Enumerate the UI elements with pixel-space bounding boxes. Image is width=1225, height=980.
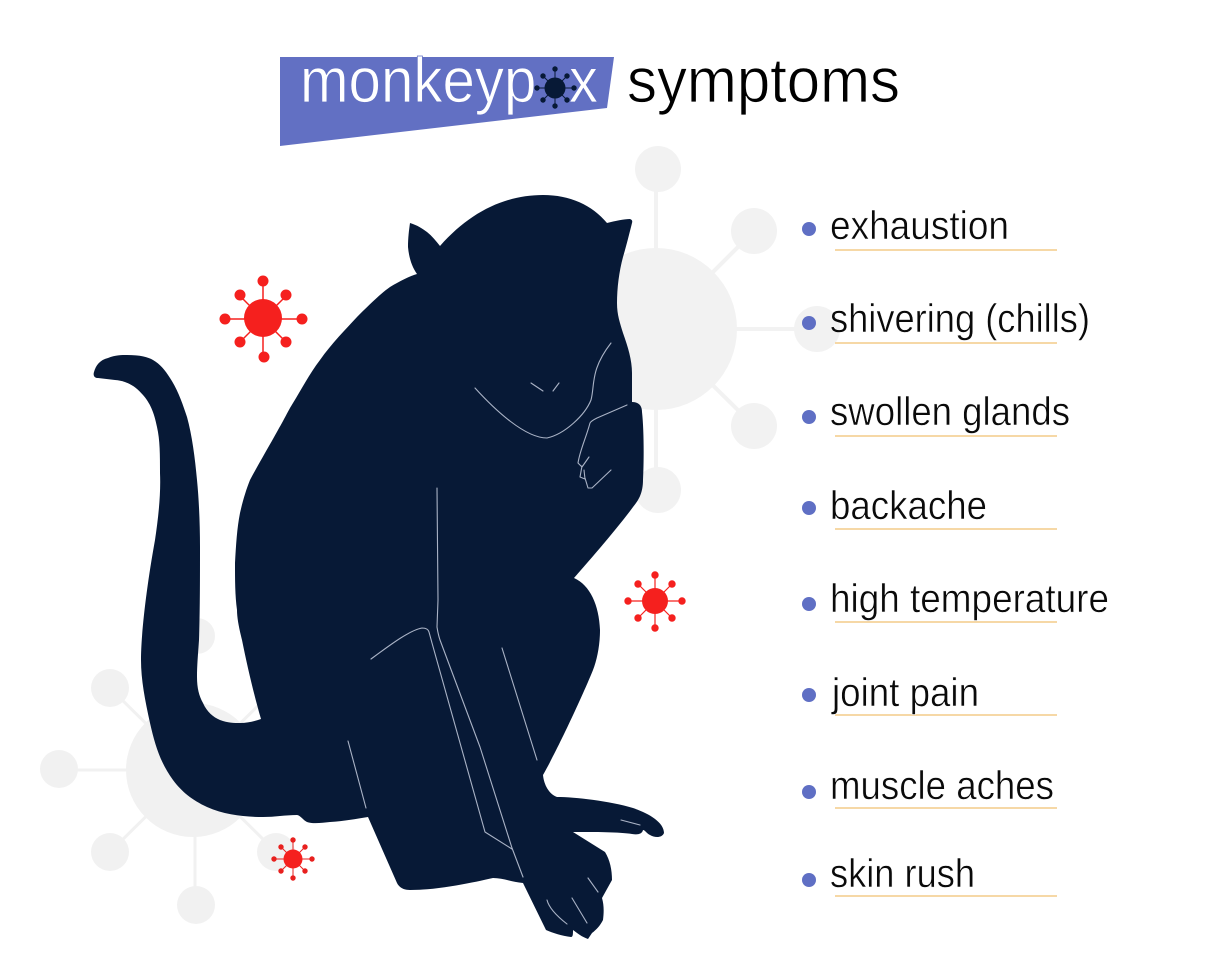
title: [280, 46, 900, 146]
icon: red virus, small: [271, 837, 315, 881]
symptom: shivering: shivering (chills): [830, 297, 1090, 341]
monkey detail lines: [348, 343, 640, 924]
icon: red virus, large: [220, 276, 308, 362]
symptom: muscle aches: muscle aches: [830, 764, 1054, 808]
symptom: joint pain: [802, 671, 1057, 715]
title word: symptoms: symptoms: [627, 46, 900, 116]
symptom: skin rush: [802, 852, 1057, 896]
symptom: backache: [802, 484, 1057, 529]
monkey body and tail: [94, 195, 664, 939]
symptom: swollen glands: swollen glands: [830, 390, 1070, 434]
monkey silhouette: [94, 195, 664, 939]
symptom: high temperature: high temperature: [830, 577, 1109, 621]
title banner: [280, 57, 614, 146]
icon: virus replacing letter o: [534, 66, 577, 109]
symptom: skin rush: skin rush: [830, 852, 975, 896]
icon: large grey virus, upper right: [575, 146, 840, 513]
symptom: backache: backache: [830, 484, 987, 528]
icon: red virus, medium: [624, 571, 686, 632]
title word: monkeypox: monkeypox: [300, 46, 598, 116]
symptom: joint pain: joint pain: [831, 671, 979, 715]
icon: large grey virus, lower left: [40, 618, 295, 924]
symptoms list: [802, 204, 1109, 896]
symptom: exhaustion: exhaustion: [830, 204, 1009, 248]
